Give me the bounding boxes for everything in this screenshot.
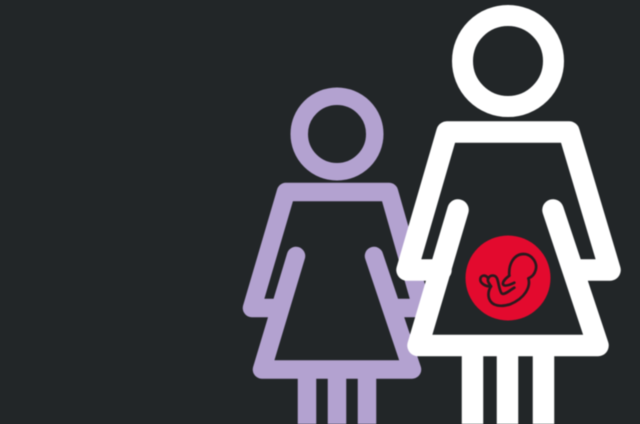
white dress interior bbox=[418, 132, 598, 345]
white head ring bbox=[462, 16, 554, 106]
white body and arms bbox=[407, 132, 610, 346]
icon: fetus in red circle bbox=[466, 236, 550, 320]
purple body and arms bbox=[252, 192, 422, 370]
foot notch bbox=[488, 278, 491, 286]
purple head ring bbox=[299, 96, 375, 172]
purple legs bbox=[307, 369, 367, 424]
fetus outline bbox=[480, 254, 536, 306]
purple female figure bbox=[252, 96, 422, 424]
red womb circle bbox=[466, 236, 550, 320]
white pregnant female figure bbox=[407, 16, 610, 424]
white legs bbox=[472, 345, 544, 424]
